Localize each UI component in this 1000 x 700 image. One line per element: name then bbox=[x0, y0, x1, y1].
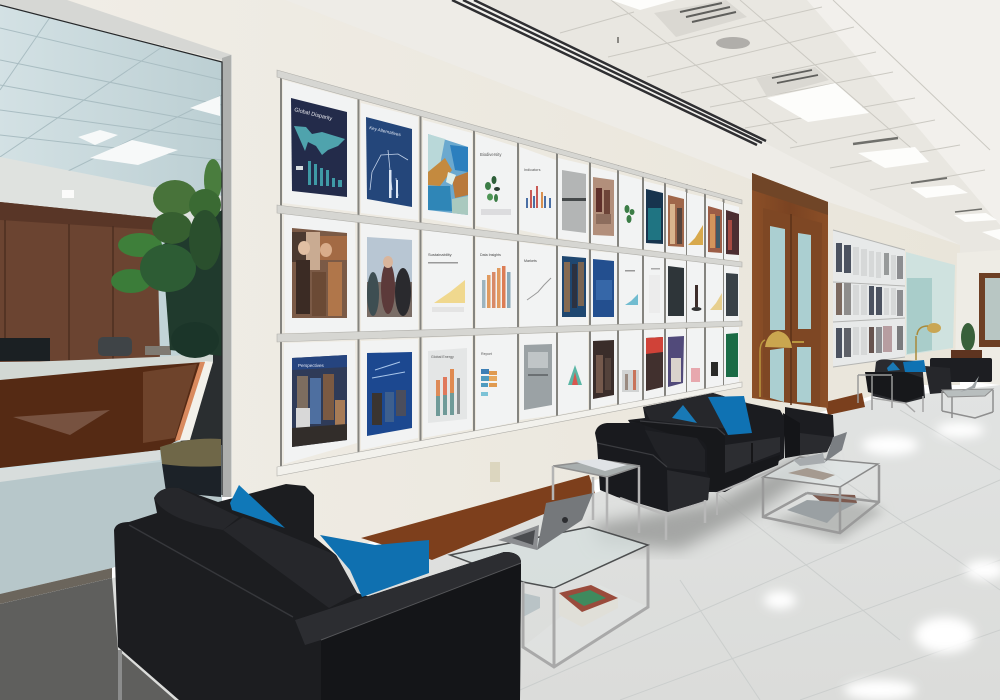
glass opening into reception room bbox=[0, 5, 222, 600]
poster: green leaves bbox=[480, 152, 511, 215]
reception desk bbox=[0, 353, 213, 482]
poster: group photo row 2 col 1 bbox=[292, 228, 347, 318]
poster: mini bar chart: Indicators bbox=[524, 168, 541, 172]
sofa left arm bbox=[628, 420, 725, 490]
armchair seat bbox=[667, 470, 710, 512]
plant bbox=[111, 159, 222, 497]
poster: blue crowd photo bbox=[367, 352, 412, 436]
far lamp bbox=[916, 323, 941, 360]
floor bbox=[0, 385, 1000, 700]
poster: gradient bars chart: Data Insights bbox=[480, 253, 501, 257]
rails bbox=[277, 70, 742, 476]
poster: global disparity map bbox=[291, 98, 347, 197]
marble veining bbox=[520, 410, 1000, 700]
door glass panels bbox=[770, 226, 811, 403]
wood door assembly bbox=[752, 173, 828, 408]
sofa body edge bbox=[129, 525, 293, 617]
poster: crowd photo row 3 col 1 bbox=[292, 355, 347, 447]
room ceiling lights bbox=[78, 96, 220, 165]
monitor and chair bbox=[0, 337, 171, 361]
poster: blue blueprint bbox=[366, 117, 412, 207]
sofa silhouette bbox=[628, 393, 784, 492]
sofa seat cushions bbox=[725, 437, 780, 473]
room floor bbox=[0, 455, 222, 594]
row 3 frames bbox=[284, 327, 739, 464]
far sofa bbox=[865, 359, 926, 403]
right armchair bbox=[783, 407, 834, 458]
sofa silhouette bbox=[114, 484, 521, 700]
middle sofa bbox=[628, 393, 784, 515]
furniture shadows bbox=[590, 455, 830, 550]
armchair back cushion bbox=[645, 430, 705, 472]
front sofa bbox=[114, 484, 521, 700]
posters: row 2 small images bbox=[562, 256, 738, 317]
ceiling speaker bbox=[716, 37, 750, 49]
poster: stacked horizontal bars: Report bbox=[481, 352, 492, 356]
row 1 frames bbox=[283, 80, 739, 261]
side table with magazines bbox=[553, 459, 640, 537]
poster: global disparity map: Global Disparity bbox=[294, 107, 333, 122]
poster: stacked horizontal bars bbox=[481, 352, 497, 396]
posters: row 3 small images bbox=[524, 333, 738, 410]
far side table bbox=[858, 375, 892, 410]
baseboards bbox=[361, 393, 865, 560]
poster: green leaves: Biodiversity bbox=[480, 152, 502, 157]
floor lamp bbox=[760, 331, 804, 397]
dark glass reflection bbox=[180, 355, 222, 445]
carpet bbox=[0, 578, 175, 700]
poster: line chart bbox=[524, 259, 551, 300]
far wall posters bbox=[833, 230, 905, 367]
plant pot bbox=[160, 439, 221, 497]
far plant bbox=[951, 323, 982, 358]
poster: blue blueprint: Key Alternatives bbox=[369, 125, 402, 137]
ceiling lights bbox=[611, 0, 1000, 240]
poster wall bbox=[277, 70, 742, 476]
wall outlet bbox=[490, 462, 500, 482]
right glass table bbox=[763, 432, 879, 533]
armchair silhouette bbox=[595, 423, 710, 512]
sofa right arm bbox=[295, 552, 521, 700]
far glass table bbox=[942, 376, 993, 418]
right laptop bbox=[793, 432, 847, 466]
poster: yellow area chart bbox=[428, 252, 465, 312]
sofa leg bbox=[118, 650, 122, 700]
far end wall and glass bbox=[906, 250, 1000, 385]
row 2 frames bbox=[284, 213, 739, 333]
poster: group photo row 2 col 2 bbox=[367, 237, 412, 317]
back wood panel bbox=[0, 202, 160, 362]
soffit with slot diffuser bbox=[285, 0, 960, 245]
ceiling bbox=[0, 0, 1000, 260]
plant leaves bbox=[111, 159, 222, 358]
middle sofa pillows bbox=[672, 396, 752, 435]
poster: mini bar chart bbox=[524, 168, 551, 208]
big front pillow bbox=[320, 535, 429, 597]
small front pillow bbox=[230, 485, 285, 528]
sofa back bbox=[643, 393, 747, 430]
front laptop bbox=[498, 493, 593, 550]
poster: gradient bars chart bbox=[480, 253, 510, 308]
sofa back cushions bbox=[154, 488, 239, 530]
dividers bbox=[281, 72, 724, 468]
stacked books bbox=[523, 585, 618, 627]
far lounge seating bbox=[858, 358, 993, 418]
poster: tall orange and teal bars: Global Energy bbox=[431, 355, 454, 359]
middle armchair bbox=[595, 423, 710, 540]
far cabinet bbox=[930, 358, 992, 382]
posters: row 1 small images bbox=[562, 170, 739, 255]
poster: line chart: Markets bbox=[524, 259, 537, 263]
far armchair bbox=[925, 366, 952, 394]
poster: crowd photo row 3 col 1: Perspectives bbox=[298, 363, 325, 368]
window frame bbox=[0, 0, 232, 604]
ceiling vents bbox=[654, 0, 982, 212]
poster: abstract art bbox=[428, 134, 468, 215]
front glass table bbox=[450, 493, 648, 667]
poster: tall orange and teal bars bbox=[428, 348, 467, 423]
poster: yellow area chart: Sustainability bbox=[428, 252, 452, 257]
floor reflections bbox=[764, 422, 1000, 700]
wall bbox=[67, 0, 960, 565]
